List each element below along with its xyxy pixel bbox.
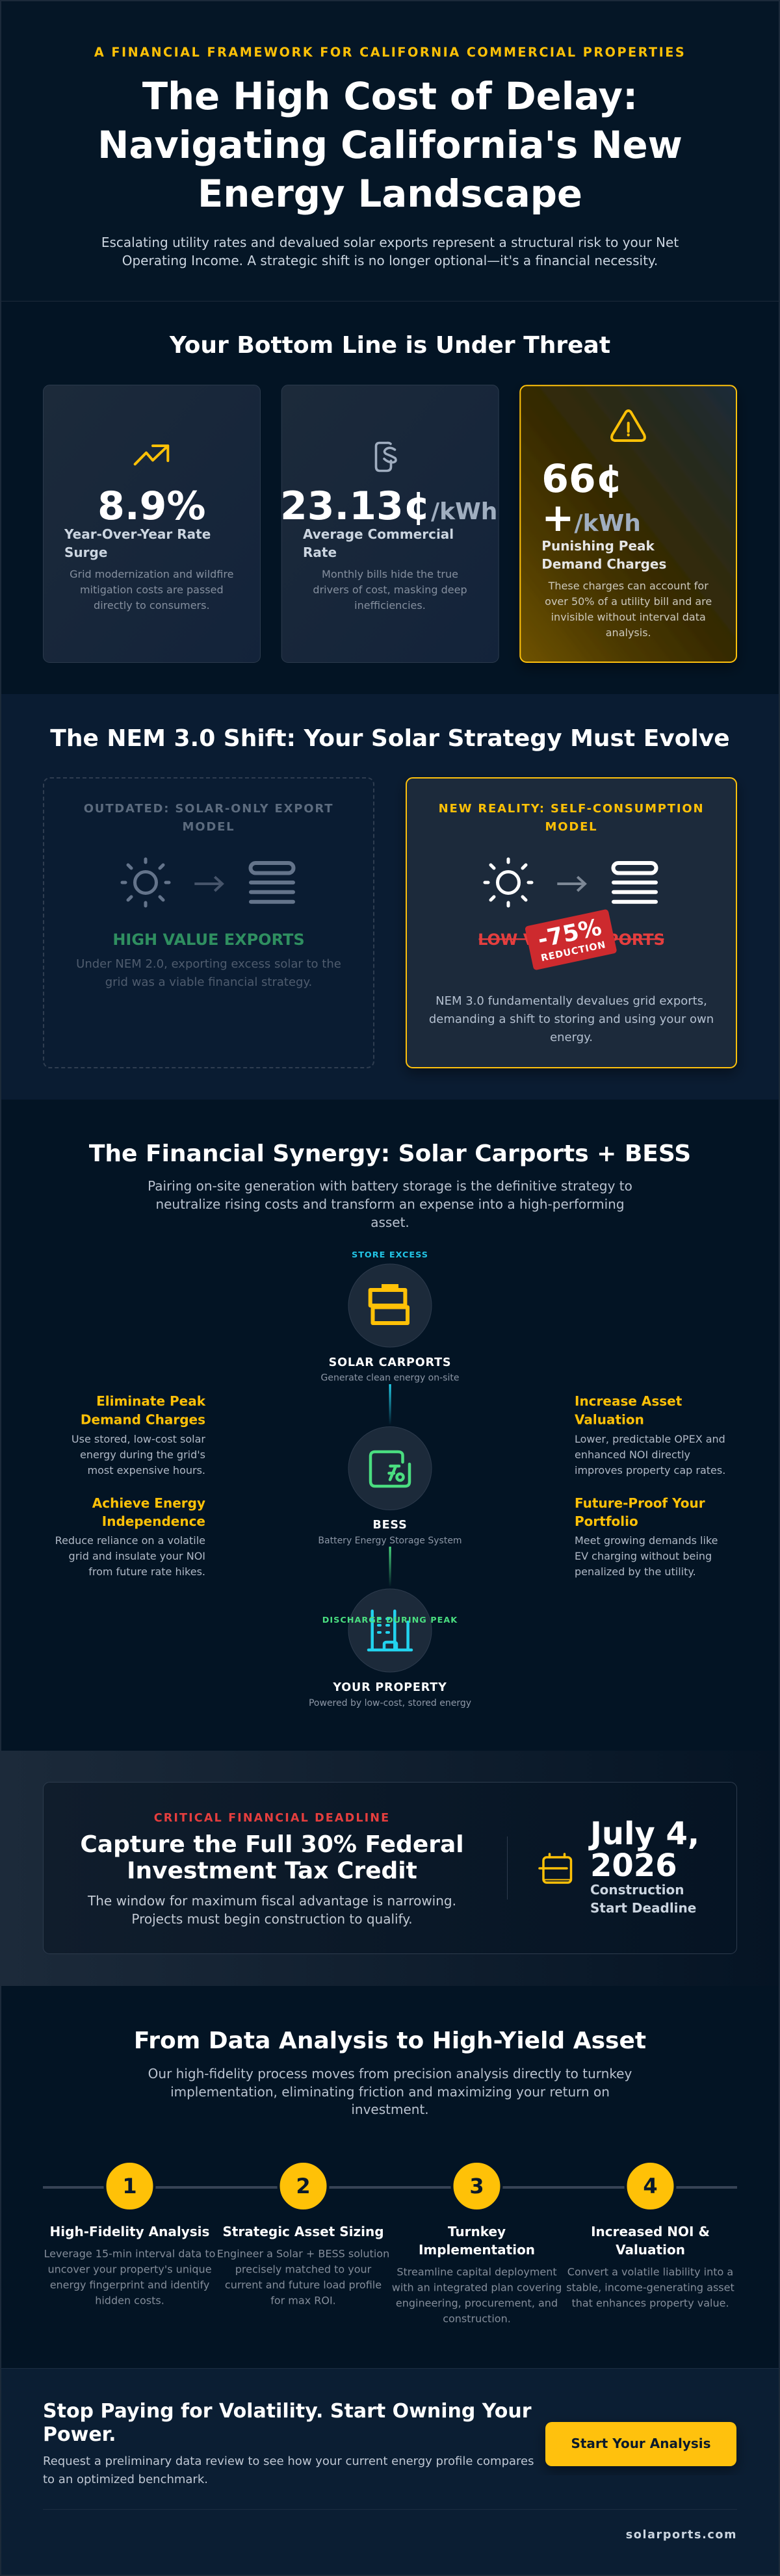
benefit: increase asset valuation — [575, 1393, 725, 1476]
step 3: engineering, procurement, and — [396, 2297, 558, 2310]
panel: new reality — [406, 778, 736, 1068]
step 4: stable, income-generating asset — [566, 2281, 734, 2294]
intro: implementation, eliminating friction and maximizing your return on — [170, 2084, 610, 2100]
benefit: eliminate peak demand charges: Demand Charges — [81, 1411, 205, 1427]
benefit: future-proof portfolio — [575, 1495, 718, 1578]
benefit: achieve energy independence: Reduce reliance on a volatile — [55, 1534, 205, 1547]
benefit: achieve energy independence: Achieve Energy — [92, 1495, 205, 1511]
step 2 — [217, 2161, 389, 2307]
benefit: increase asset valuation: Increase Asset — [575, 1393, 682, 1409]
step 4: Convert a volatile liability into a — [567, 2265, 733, 2278]
section: financial synergy — [0, 1100, 780, 1751]
step 3: Turnkey — [448, 2224, 506, 2239]
description — [70, 568, 233, 612]
description: over 50% of a utility bill and are — [545, 595, 712, 608]
description: directly to consumers. — [94, 599, 210, 612]
date: July 4, — [588, 1816, 699, 1852]
benefit: future-proof portfolio: penalized by the utility. — [575, 1565, 696, 1578]
description: Monthly bills hide the true — [322, 568, 458, 580]
benefit: increase asset valuation: enhanced NOI directly — [575, 1449, 690, 1461]
timeline line — [43, 2186, 737, 2189]
panel heading: NEW REALITY: SELF-CONSUMPTION — [439, 802, 704, 816]
intro: Our high-fidelity process moves from precision analysis directly to turnkey — [148, 2066, 632, 2081]
label: Year-Over-Year Rate — [64, 526, 211, 542]
intro — [148, 1178, 632, 1230]
step 4: Valuation — [616, 2242, 685, 2258]
step 3: construction. — [443, 2312, 511, 2325]
description — [429, 994, 714, 1044]
heading: The Financial Synergy: Solar Carports + BESS — [89, 1140, 691, 1167]
stat: /kWh — [431, 498, 497, 525]
step 1: High-Fidelity Analysis — [50, 2224, 209, 2239]
benefit: increase asset valuation: improves property cap rates. — [575, 1464, 725, 1476]
icon: trending up — [135, 446, 168, 464]
icon: sun — [122, 859, 169, 906]
benefit: achieve energy independence: grid and insulate your NOI — [69, 1550, 205, 1562]
subtitle — [101, 235, 679, 268]
arrow — [194, 877, 222, 891]
footer url: solarports.com — [626, 2529, 737, 2542]
description — [43, 2454, 534, 2486]
node sublabel: Powered by low-cost, stored energy — [309, 1698, 471, 1708]
description: Grid modernization and wildfire — [70, 568, 233, 580]
description: drivers of cost, masking deep — [313, 584, 467, 596]
step 3 — [392, 2161, 562, 2325]
kicker: CRITICAL FINANCIAL DEADLINE — [154, 1812, 390, 1825]
benefit: future-proof portfolio: Future-Proof Your — [575, 1495, 705, 1511]
section: process — [0, 1986, 780, 2368]
heading: Your Bottom Line is Under Threat — [169, 332, 610, 359]
stat — [280, 483, 497, 529]
date label: Start Deadline — [590, 1900, 696, 1916]
icon: battery percent — [370, 1452, 410, 1486]
label — [303, 526, 454, 560]
node label: SOLAR CARPORTS — [329, 1356, 451, 1369]
date label — [590, 1882, 696, 1916]
icon: sun — [485, 859, 532, 906]
description: analysis. — [606, 626, 651, 639]
section: deadline — [0, 1751, 780, 1986]
panel heading: OUTDATED: SOLAR-ONLY EXPORT — [84, 802, 333, 816]
step 2: Strategic Asset Sizing — [222, 2224, 384, 2239]
node sublabel: Battery Energy Storage System — [318, 1536, 462, 1546]
step 4: 4 — [643, 2174, 658, 2198]
step 4: that enhances property value. — [571, 2297, 729, 2310]
flow label: store excess: STORE EXCESS — [352, 1250, 428, 1260]
node label: YOUR PROPERTY — [332, 1681, 447, 1694]
benefit: eliminate peak demand charges: Eliminate Peak — [96, 1393, 206, 1409]
button: Start Your Analysis — [571, 2436, 711, 2451]
node: property — [309, 1589, 471, 1708]
headline — [80, 1831, 464, 1885]
description: These charges can account for — [548, 580, 708, 592]
card: peak demand — [520, 385, 736, 662]
headline — [43, 2400, 532, 2446]
step 4: Increased NOI & — [591, 2224, 710, 2239]
description: The window for maximum fiscal advantage is narrowing. — [87, 1893, 456, 1909]
panel heading — [84, 802, 333, 834]
icon: calendar — [540, 1854, 571, 1883]
icon: battery stack — [251, 863, 294, 902]
connector: BESS to property — [389, 1547, 391, 1587]
description — [76, 957, 341, 989]
benefit: achieve energy independence: from future rate hikes. — [88, 1565, 205, 1578]
label: Punishing Peak — [541, 538, 655, 554]
step 2: 2 — [296, 2174, 311, 2198]
title: Energy Landscape — [198, 172, 582, 216]
section: NEM 3.0 shift — [0, 694, 780, 1100]
section: bottom line under threat — [0, 302, 780, 694]
step 1 — [44, 2161, 215, 2307]
intro: asset. — [370, 1215, 410, 1230]
description: Under NEM 2.0, exporting excess solar to the — [76, 957, 341, 971]
step 3: 3 — [469, 2174, 484, 2198]
stat: /kWh — [575, 510, 641, 537]
section: header — [0, 0, 780, 302]
intro: neutralize rising costs and transform an expense into a high-performing — [155, 1196, 625, 1212]
badge — [525, 909, 618, 970]
benefit: future-proof portfolio: Portfolio — [575, 1513, 638, 1529]
stat: 23.13¢ — [280, 483, 431, 529]
title: The High Cost of Delay: — [142, 75, 638, 118]
description — [545, 580, 712, 639]
intro: investment. — [351, 2102, 429, 2117]
step 1: Leverage 15-min interval data to — [44, 2247, 215, 2260]
heading: From Data Analysis to High-Yield Asset — [134, 2028, 646, 2054]
date — [588, 1816, 699, 1884]
benefit: eliminate peak demand charges: energy during the grid's — [80, 1449, 205, 1461]
description — [313, 568, 467, 612]
label: Surge — [64, 545, 107, 560]
card: rate surge — [43, 385, 260, 663]
flow label: discharge during peak: DISCHARGE DURING PEAK — [322, 1616, 458, 1625]
section: call to action — [0, 2368, 780, 2576]
description: NEM 3.0 fundamentally devalues grid exports, — [436, 994, 707, 1008]
icon: phone dollar — [376, 443, 396, 470]
headline: Investment Tax Credit — [127, 1857, 417, 1885]
benefit: achieve energy independence — [55, 1495, 205, 1578]
panel: deadline box — [43, 1782, 737, 1953]
panel: outdated — [44, 778, 374, 1068]
label: Rate — [303, 545, 337, 560]
node: solar carports — [321, 1264, 459, 1383]
benefit: eliminate peak demand charges: most expensive hours. — [87, 1464, 205, 1476]
step 1: 1 — [122, 2174, 137, 2198]
label: Demand Charges — [541, 556, 666, 572]
panel heading: MODEL — [545, 820, 597, 834]
intro — [148, 2066, 632, 2117]
heading: The NEM 3.0 Shift: Your Solar Strategy Must Evolve — [50, 725, 730, 752]
step 2: current and future load profile — [225, 2278, 382, 2291]
button — [545, 2422, 736, 2466]
badge: -75% — [536, 914, 604, 953]
value label: LOW VALUE EXPORTS — [478, 931, 665, 949]
step 4 — [566, 2161, 734, 2310]
benefit: increase asset valuation: Valuation — [575, 1411, 644, 1427]
stat: + — [541, 495, 575, 541]
description: Request a preliminary data review to see how your current energy profile compares — [43, 2454, 534, 2468]
node sublabel: Generate clean energy on-site — [321, 1372, 459, 1383]
description: grid was a viable financial strategy. — [105, 975, 312, 989]
step 3: Implementation — [419, 2242, 535, 2258]
badge: REDUCTION — [540, 940, 607, 964]
card: commercial rate — [280, 385, 499, 663]
description: Projects must begin construction to qualify. — [131, 1911, 413, 1927]
node label: BESS — [372, 1519, 408, 1532]
description — [87, 1893, 456, 1927]
headline: Stop Paying for Volatility. Start Owning Your — [43, 2400, 532, 2423]
icon: warning — [612, 411, 645, 441]
divider — [507, 1836, 508, 1900]
label — [64, 526, 211, 560]
benefit: eliminate peak demand charges — [72, 1393, 206, 1476]
description: demanding a shift to storing and using your own — [429, 1012, 714, 1026]
eyebrow: A FINANCIAL FRAMEWORK FOR CALIFORNIA COMMERCIAL PROPERTIES — [94, 45, 686, 60]
connector: solar to BESS — [389, 1384, 391, 1425]
date label: Construction — [590, 1882, 684, 1898]
stat: 8.9% — [98, 483, 206, 529]
label: Average Commercial — [303, 526, 454, 542]
date: 2026 — [590, 1848, 677, 1884]
step 3: with an integrated plan covering — [392, 2281, 562, 2294]
label — [541, 538, 666, 572]
step 2: Engineer a Solar + BESS solution — [217, 2247, 389, 2260]
stat — [541, 456, 641, 541]
description: energy. — [550, 1031, 593, 1044]
intro: Pairing on-site generation with battery storage is the definitive strategy to — [148, 1178, 632, 1194]
headline: Capture the Full 30% Federal — [80, 1831, 464, 1858]
icon: carport battery — [370, 1284, 408, 1323]
subtitle: Escalating utility rates and devalued solar exports represent a structural risk to your Net — [101, 235, 679, 250]
arrow — [557, 877, 585, 891]
description: invisible without interval data — [551, 611, 706, 623]
panel heading: MODEL — [183, 820, 235, 834]
benefit: future-proof portfolio: Meet growing demands like — [575, 1534, 718, 1547]
subtitle: Operating Income. A strategic shift is no longer optional—it's a financial necessity. — [122, 253, 658, 268]
stat: 66¢ — [541, 456, 623, 502]
benefit: future-proof portfolio: EV charging without being — [575, 1550, 712, 1562]
step 1: uncover your property's unique — [47, 2263, 212, 2276]
description: mitigation costs are passed — [80, 584, 224, 596]
benefit: achieve energy independence: Independence — [102, 1513, 205, 1529]
benefit: increase asset valuation: Lower, predictable OPEX and — [575, 1433, 725, 1445]
step 1: energy fingerprint and identify — [50, 2278, 209, 2291]
icon: building — [369, 1611, 411, 1650]
title: Navigating California's New — [98, 123, 682, 167]
icon: battery stack — [614, 863, 656, 902]
step 2: precisely matched to your — [235, 2263, 372, 2276]
description: inefficiencies. — [354, 599, 426, 612]
step 2: for max ROI. — [270, 2294, 336, 2307]
step 3: Streamline capital deployment — [396, 2265, 557, 2278]
step 1: hidden costs. — [95, 2294, 164, 2307]
value label: HIGH VALUE EXPORTS — [112, 931, 305, 949]
description: to an optimized benchmark. — [43, 2473, 208, 2486]
benefit: eliminate peak demand charges: Use stored, low-cost solar — [72, 1433, 205, 1445]
panel heading — [439, 802, 704, 834]
headline: Power. — [43, 2423, 116, 2446]
node: BESS — [318, 1427, 462, 1546]
title — [98, 75, 682, 216]
